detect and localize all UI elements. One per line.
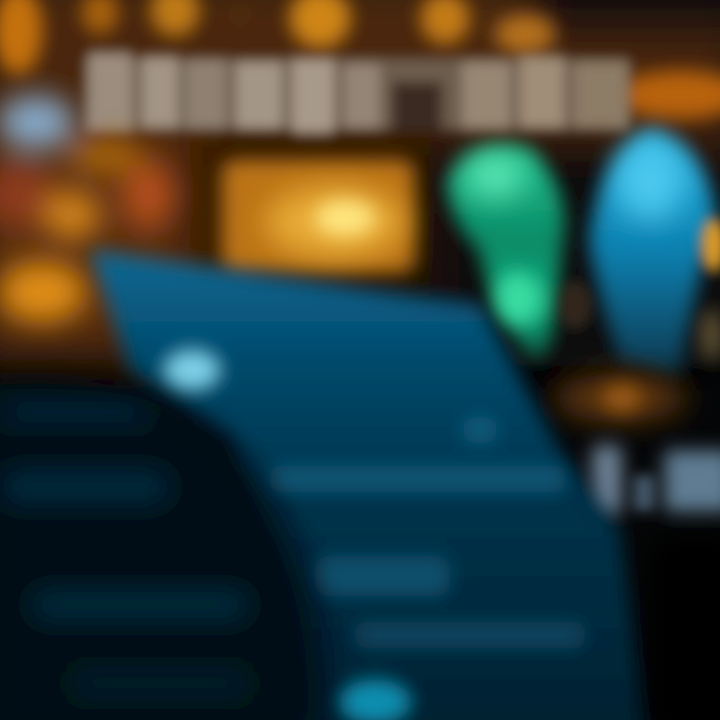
blurred title (85, 52, 630, 134)
green glow (448, 146, 563, 362)
dark hands in the lower left (0, 382, 322, 720)
dark right corner (650, 535, 720, 720)
blue glow (559, 130, 720, 375)
background: warm upper area (0, 0, 720, 365)
left side glowing blobs (0, 96, 174, 322)
central orange panel (222, 160, 414, 272)
lower right orange and grey blurred text (554, 374, 720, 515)
laptop body (90, 250, 650, 720)
top row of orange lights (0, 0, 720, 119)
